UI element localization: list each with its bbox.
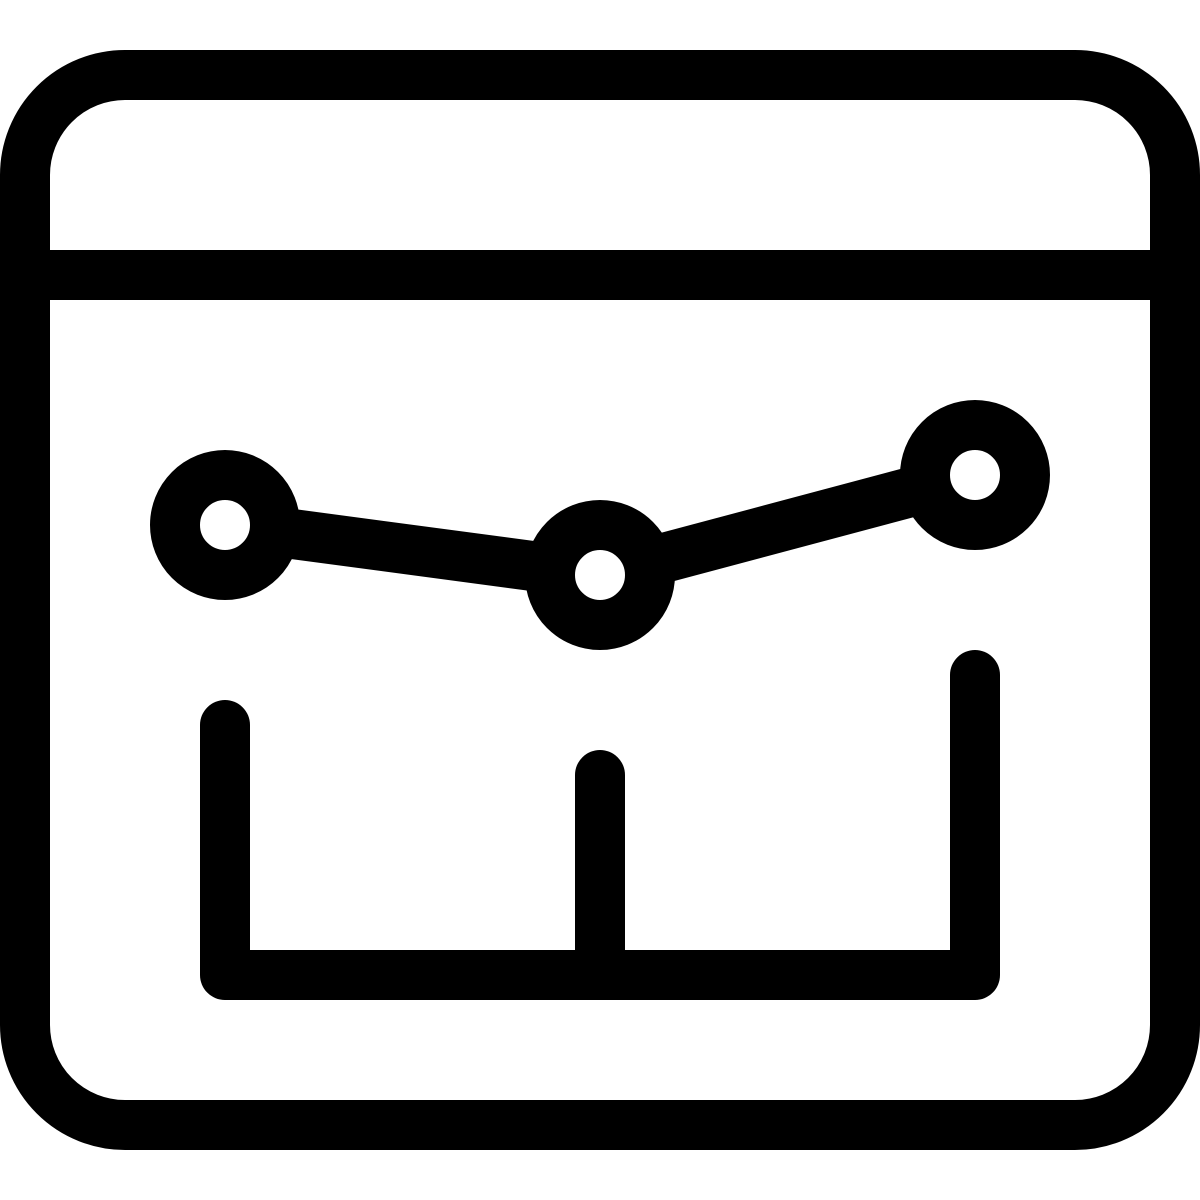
window title bar divider	[25, 250, 1175, 300]
bar chart axis and bars	[225, 675, 975, 975]
data point left	[175, 475, 275, 575]
data point right	[925, 425, 1025, 525]
line chart	[175, 425, 1025, 625]
line segments	[225, 475, 975, 575]
data point middle	[550, 525, 650, 625]
